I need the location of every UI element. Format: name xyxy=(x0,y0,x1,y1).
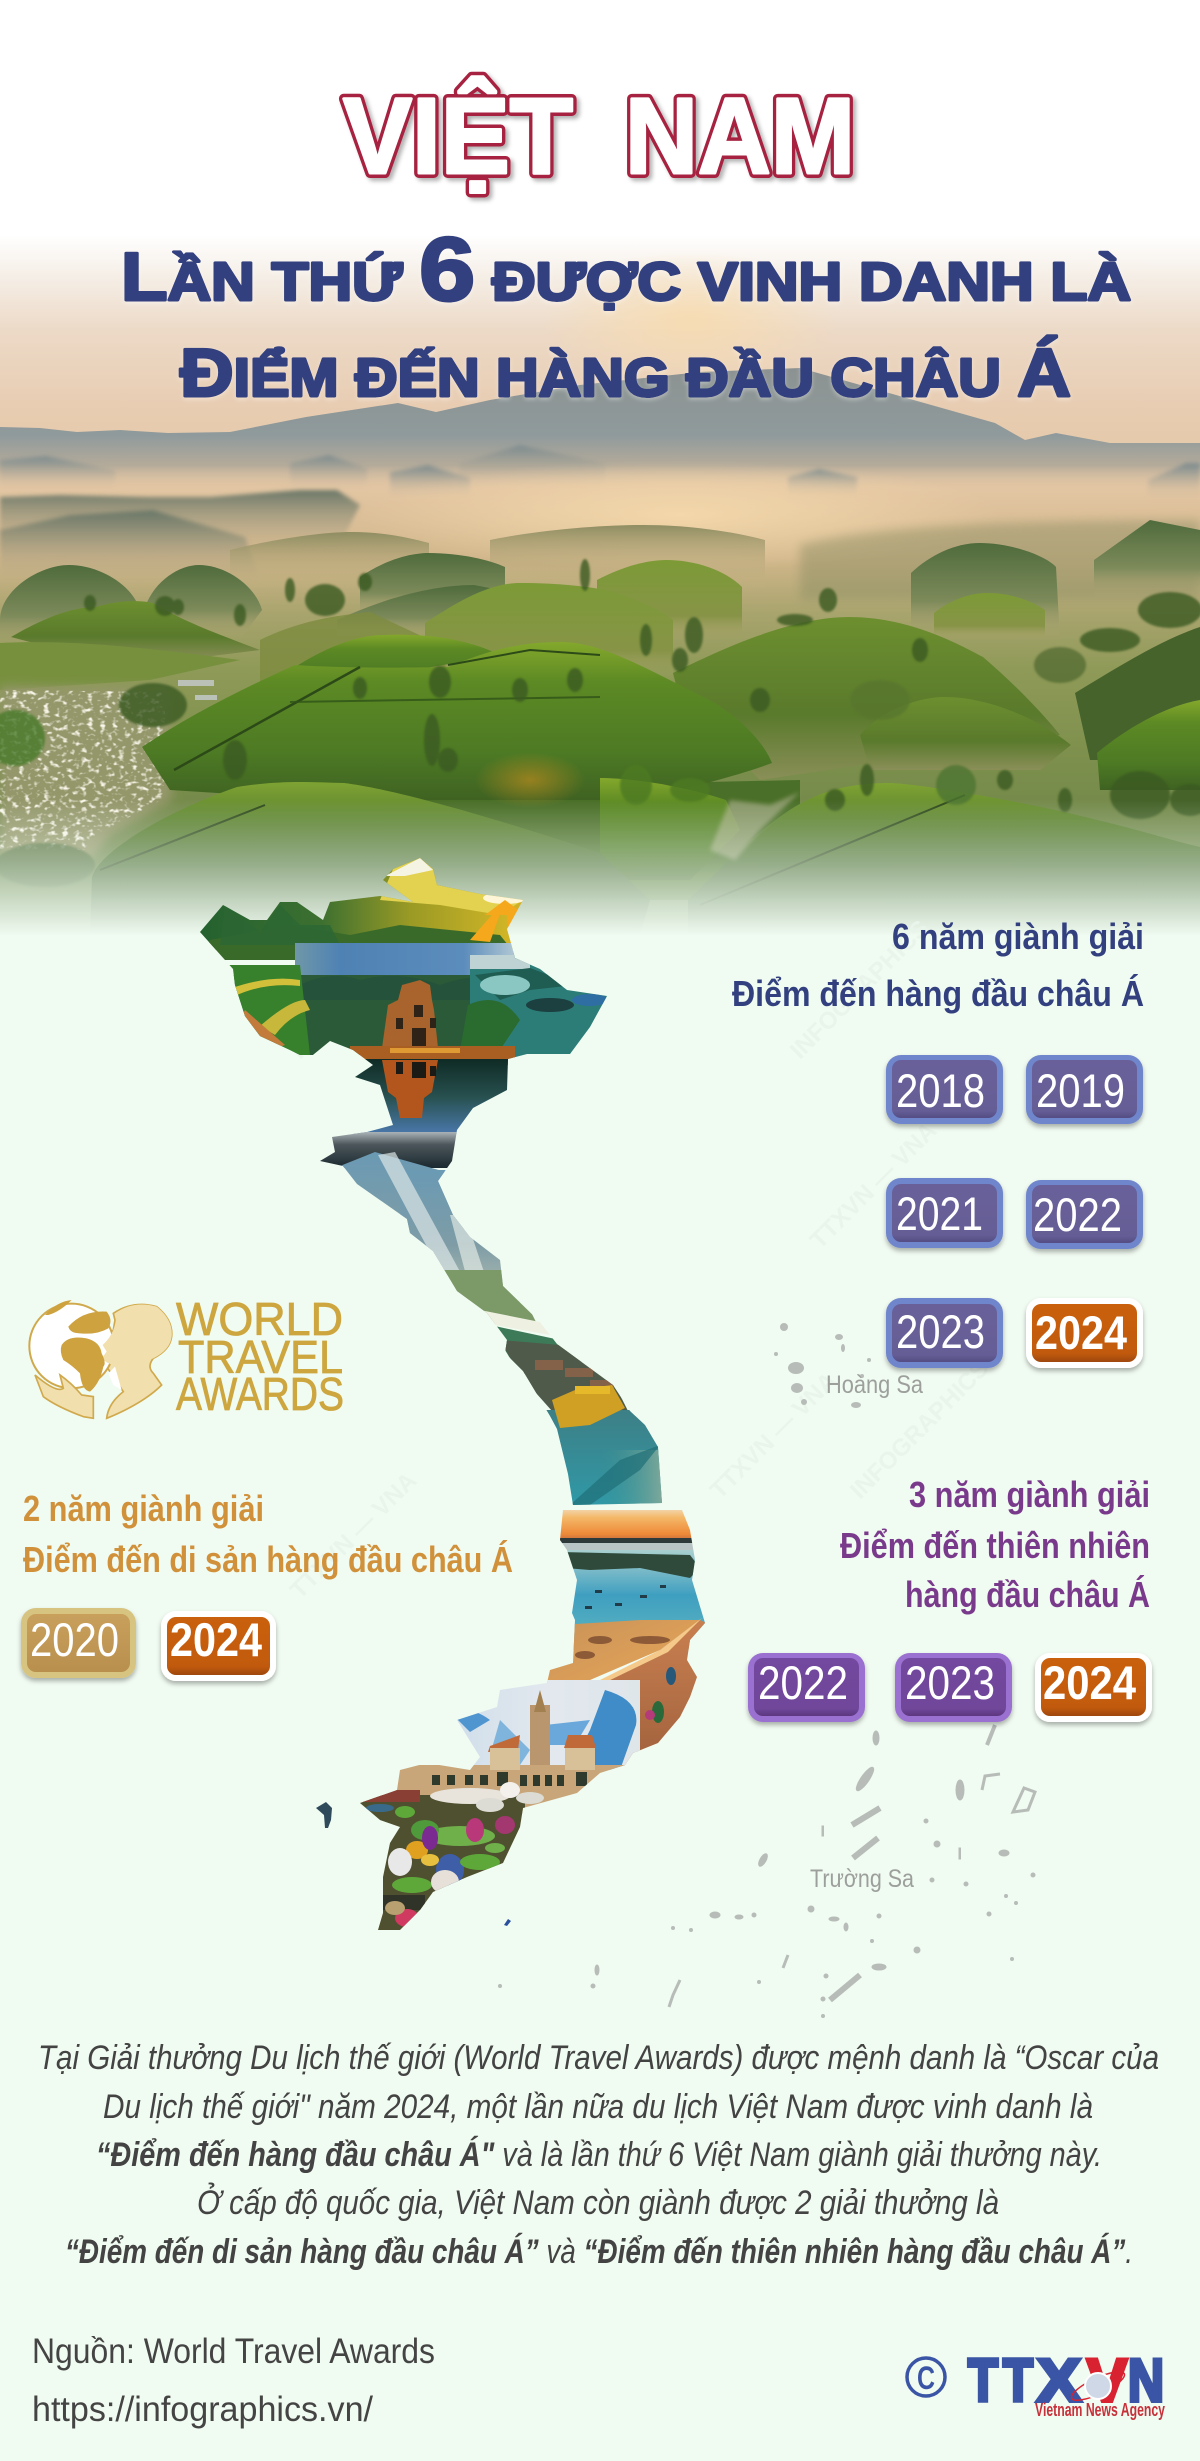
dark band and waterfall xyxy=(315,1132,590,1375)
title fill: NAM xyxy=(625,75,855,196)
text block: summary paragraph xyxy=(38,2039,1159,2271)
map of Vietnam: north and centre xyxy=(190,850,665,1510)
badge 2022: 2022 xyxy=(1033,1188,1122,1241)
badge 2024: 2024 xyxy=(1043,1656,1136,1709)
badge 2024 xyxy=(1026,1298,1143,1368)
logo wordmark: WORLD xyxy=(176,1293,343,1345)
watermarks xyxy=(285,915,994,1604)
agency wordmark: V xyxy=(1087,2347,1127,2414)
icon: copyright: C xyxy=(917,2360,935,2396)
badge 2023 xyxy=(895,1653,1012,1722)
badge 2021: 2021 xyxy=(896,1187,983,1240)
badge 2023: 2023 xyxy=(896,1305,985,1358)
agency wordmark: T xyxy=(968,2347,998,2414)
logo wordmark xyxy=(176,1293,344,1420)
title fill: VIỆT xyxy=(343,75,573,196)
heading: 2 years: 2 năm giành giải xyxy=(23,1488,264,1529)
label: Trường Sa: Trường Sa xyxy=(810,1865,914,1893)
title outline: NAM xyxy=(625,75,855,196)
Mekong floating market xyxy=(355,1782,544,1935)
text block: summary paragraph: Ở cấp độ quốc gia, Việt Nam còn giành được 2 giải thưởng là xyxy=(197,2183,999,2222)
badge 2019 xyxy=(1026,1055,1143,1124)
badge 2021 xyxy=(886,1178,1003,1248)
label: Hoàng Sa: Hoàng Sa xyxy=(826,1371,923,1399)
panel: landscape photo of tea hills xyxy=(0,235,1200,939)
heading: subtitle: ĐIỂM ĐẾN HÀNG ĐẦU CHÂU Á xyxy=(180,335,1071,411)
watermarks: TTXVN — VNA xyxy=(285,1467,422,1604)
icon: copyright xyxy=(907,2358,945,2396)
heading: 3 years: Điểm đến thiên nhiên xyxy=(840,1525,1150,1566)
Ho Chi Minh City hall and sky xyxy=(396,1680,640,1815)
heading: 2 years xyxy=(23,1488,513,1580)
map of Vietnam: south xyxy=(355,1505,720,1935)
title xyxy=(343,75,855,196)
watermarks: TTXVN — VNA xyxy=(705,1367,842,1504)
watermarks: INFOGRAPHICS xyxy=(785,915,934,1064)
heading: 2 years: Điểm đến di sản hàng đầu châu Á xyxy=(23,1539,513,1580)
badge 2023: 2023 xyxy=(905,1656,995,1709)
logo: TTXVN copyright xyxy=(907,2347,1165,2420)
islands: Hoàng Sa xyxy=(774,1323,871,1408)
badge 2023 xyxy=(886,1298,1003,1368)
badge 2020: 2020 xyxy=(30,1613,119,1666)
title fill xyxy=(343,75,855,196)
badge 2018 xyxy=(886,1055,1003,1124)
title outline xyxy=(343,75,855,196)
agency wordmark: N xyxy=(1128,2347,1164,2414)
badge 2024: 2024 xyxy=(1035,1306,1127,1359)
panel: 3 years nature destination xyxy=(748,1474,1152,1722)
sunset beach xyxy=(547,1510,705,1766)
watermarks: TTXVN — VNA xyxy=(805,1117,942,1254)
text block: summary paragraph: “Điểm đến hàng đầu châu Á" và là lần thứ 6 Việt Nam giành giải thưởng này. xyxy=(96,2136,1102,2174)
heading: 6 years: Điểm đến hàng đầu châu Á xyxy=(732,973,1144,1014)
icon: globe with orbit xyxy=(1068,2366,1128,2406)
badge 2018: 2018 xyxy=(896,1064,985,1117)
heading: 6 years: 6 năm giành giải xyxy=(892,916,1144,957)
icon: globe and head xyxy=(29,1300,172,1418)
Turtle Tower lake scene xyxy=(225,943,620,1134)
Hoi An town and river xyxy=(500,1340,665,1510)
heading: 3 years xyxy=(840,1474,1150,1615)
text block: source: https://infographics.vn/ xyxy=(32,2390,373,2429)
heading: 6 years xyxy=(732,916,1144,1014)
logo: World Travel Awards xyxy=(29,1293,344,1420)
logo wordmark: TRAVEL xyxy=(178,1331,343,1383)
heading: 3 years: hàng đầu châu Á xyxy=(905,1574,1150,1615)
badge 2024 xyxy=(1035,1653,1152,1722)
panel: 2 years heritage destination xyxy=(21,1488,513,1681)
title outline: VIỆT xyxy=(343,75,573,196)
watermarks: INFOGRAPHICS xyxy=(285,915,434,1064)
agency wordmark xyxy=(968,2347,1164,2414)
badge 2019: 2019 xyxy=(1036,1064,1125,1117)
text block: source xyxy=(32,2332,435,2429)
badge 2024 xyxy=(161,1611,276,1681)
heading: subtitle: LẦN THỨ 6 ĐƯỢC VINH DANH LÀ xyxy=(121,220,1131,320)
badge 2024: 2024 xyxy=(170,1613,262,1666)
logo wordmark: AWARDS xyxy=(176,1368,344,1420)
north mountains at sunset xyxy=(200,858,523,960)
badge 2022 xyxy=(748,1653,865,1722)
agency wordmark: X xyxy=(1037,2347,1081,2414)
badge 2022: 2022 xyxy=(758,1656,848,1709)
islands: Trường Sa xyxy=(498,1725,1035,2018)
watermarks: INFOGRAPHICS xyxy=(845,1355,994,1504)
heading: subtitle xyxy=(121,220,1131,411)
text block: source: Nguồn: World Travel Awards xyxy=(32,2332,435,2371)
agency wordmark: T xyxy=(1003,2347,1033,2414)
heading: 3 years: 3 năm giành giải xyxy=(909,1474,1150,1515)
islands near the mainland xyxy=(316,1802,511,1926)
badge 2022 xyxy=(1026,1180,1143,1249)
badge 2020 xyxy=(21,1608,136,1678)
panel: 6 years top destination in Asia xyxy=(732,916,1144,1368)
white top band xyxy=(0,0,1200,240)
